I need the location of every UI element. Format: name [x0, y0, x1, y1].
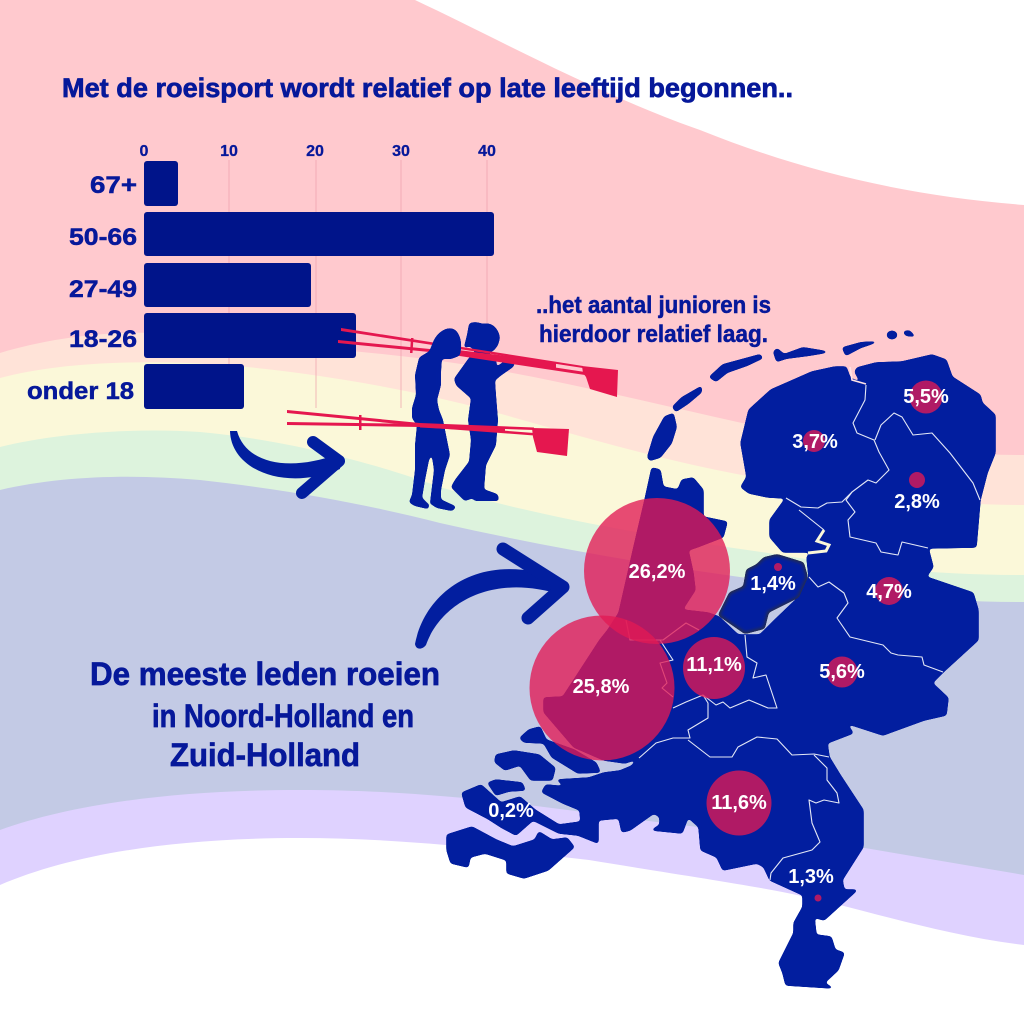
- province percentages: 25,8%: [573, 676, 630, 698]
- Wadden islands: [648, 331, 914, 460]
- heading: provinces: Zuid-Holland: [170, 737, 360, 773]
- axis tick labels: 10: [220, 143, 238, 160]
- callout: junioren: hierdoor relatief laag.: [539, 321, 768, 348]
- heading: provinces: [90, 656, 440, 773]
- arrow: big: [415, 549, 564, 649]
- province percentages: 5,6%: [819, 661, 865, 683]
- axis tick labels: 30: [392, 143, 410, 160]
- province percentages: [488, 386, 949, 888]
- Flevoland: [719, 555, 807, 633]
- Zeeland islands and Voorne: [447, 727, 600, 878]
- mainland: [462, 355, 995, 988]
- heading: provinces: De meeste leden roeien: [90, 656, 440, 692]
- province value circles: [530, 380, 942, 902]
- province percentages: 11,6%: [711, 792, 767, 814]
- age labels: [27, 172, 137, 405]
- axis tick labels: 20: [306, 143, 324, 160]
- title: Met de roeisport wordt relatief op late leeftijd begonnen..: [62, 73, 793, 103]
- province percentages: 2,8%: [894, 491, 940, 513]
- upper oar: [338, 328, 618, 397]
- map of the Netherlands: [447, 331, 995, 988]
- bar chart: age groups: [27, 143, 496, 409]
- age labels: 50-66: [69, 224, 137, 251]
- axis tick labels: [140, 143, 496, 160]
- axis gridlines: [229, 160, 487, 408]
- province borders: [626, 385, 980, 880]
- axis tick labels: 0: [140, 143, 149, 160]
- province percentages: 26,2%: [629, 561, 686, 583]
- age labels: 67+: [90, 172, 137, 199]
- callout: junioren: [536, 292, 771, 348]
- Lauwersmeer inlet: [850, 367, 866, 384]
- province percentages: 5,5%: [903, 386, 949, 408]
- age labels: 27-49: [69, 276, 137, 303]
- axis tick labels: 40: [478, 143, 496, 160]
- arrow: small: [230, 431, 340, 493]
- woman silhouette: [452, 323, 514, 500]
- lower oar: [287, 410, 569, 456]
- age labels: onder 18: [27, 378, 134, 405]
- province percentages: 4,7%: [866, 581, 912, 603]
- heading: provinces: in Noord-Holland en: [152, 698, 414, 734]
- channel beside Noordoostpolder: [808, 530, 829, 553]
- callout: junioren: ..het aantal junioren is: [536, 292, 771, 319]
- age labels: 18-26: [69, 326, 137, 353]
- province percentages: 0,2%: [488, 800, 534, 822]
- province percentages: 11,1%: [686, 654, 742, 676]
- province percentages: 3,7%: [792, 431, 838, 453]
- icon: rowers carrying oars: [287, 323, 618, 510]
- province percentages: 1,3%: [788, 866, 834, 888]
- bars: [144, 161, 494, 409]
- man silhouette: [410, 329, 460, 510]
- province percentages: 1,4%: [750, 573, 796, 595]
